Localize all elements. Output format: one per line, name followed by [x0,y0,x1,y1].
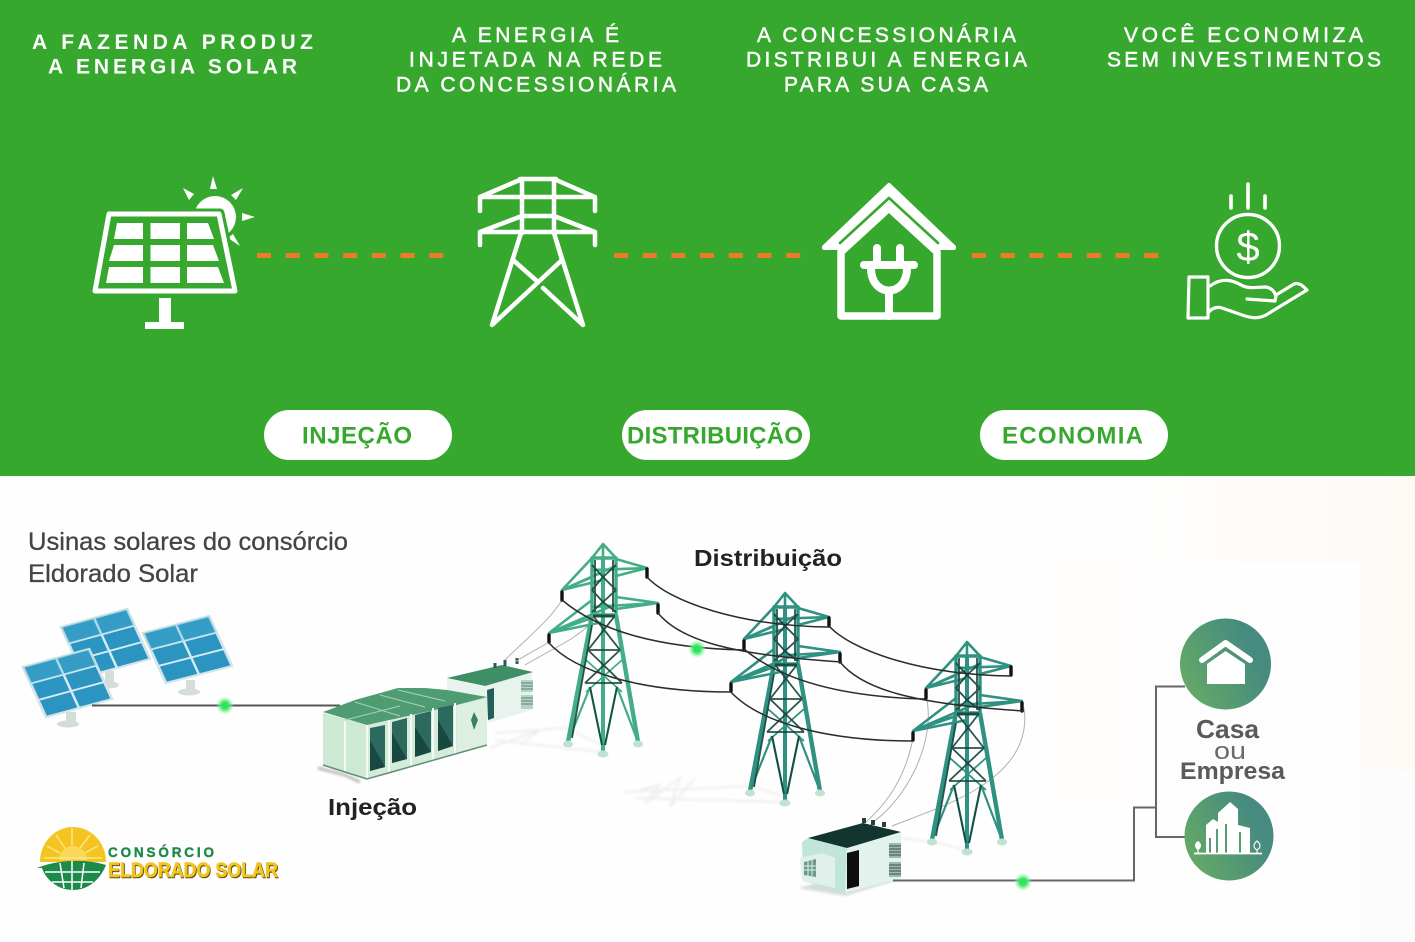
heading: você economiza [1107,24,1381,72]
heading: a energia é injetada [396,24,676,97]
button: injeção [264,410,452,460]
heading: a energia é injetada: DA CONCESSIONÁRIA [396,74,676,97]
icon: solar panel with sun [93,176,255,329]
marker: green dot 2 [688,640,706,658]
text: casa ou empresa: Empresa [1180,758,1286,785]
icon: buildings circle [1184,792,1274,880]
arrow: dashed connector economia [972,253,1159,258]
heading: a energia é injetada: A ENERGIA É [452,24,619,47]
shadow: ground shadows [318,728,967,850]
logo: consórcio eldorado solar [37,827,279,890]
illustration: tower 2 [731,593,840,806]
heading: a fazenda produz: A ENERGIA SOLAR [48,56,297,78]
cable: panels to injection [92,704,340,706]
text: distribuição label: Distribuição [694,545,842,571]
illustration: transformer [798,818,901,896]
illustration: injection units [323,658,533,779]
button: distribuição [622,410,810,460]
logo: consórcio eldorado solar: ELDORADO SOLAR [108,859,278,882]
heading: a energia é injetada: INJETADA NA REDE [409,49,662,72]
text: usinas solares: Usinas solares do consórcio [28,528,348,556]
illustration: tower 1 [549,544,658,758]
illustration: tower 3 [913,642,1022,856]
heading: você economiza: VOCÊ ECONOMIZA [1124,24,1363,47]
illustration: solar panels [23,609,232,728]
button: economia: ECONOMIA [1002,422,1143,450]
text: injeção label: Injeção [328,794,417,820]
logo: consórcio eldorado solar: ELDORADO SOLAR [109,860,279,883]
button: injeção: INJEÇÃO [302,422,412,450]
icon: transmission tower [480,179,595,325]
icon: hand holding coin [1188,184,1307,318]
button: distribuição: DISTRIBUIÇÃO [627,422,803,450]
logo: consórcio eldorado solar: CONSÓRCIO [108,845,214,860]
cable: transformer to consumers [893,686,1186,880]
icon: house circle [1180,618,1271,710]
marker: green dot 3 [1014,873,1032,891]
heading: a concessionária distribui: DISTRIBUI A ENERGIA [746,49,1027,72]
text: casa ou empresa: Casa [1196,714,1260,744]
heading: a fazenda produz: A FAZENDA PRODUZ [32,31,313,54]
cables: power lines span 2 [730,626,1024,741]
heading: a concessionária distribui: A CONCESSIONÁRIA [757,24,1016,47]
cables: power lines span 1 [548,577,842,692]
cables: thin feeders [505,600,1025,826]
text: usinas solares: Eldorado Solar [28,560,198,588]
text: casa ou empresa: ou [1214,738,1246,765]
icon: house with plug [824,185,954,316]
heading: a concessionária distribui [746,24,1027,97]
heading: a concessionária distribui: PARA SUA CASA [784,74,988,97]
panel: lower energy flow diagram [23,528,1286,896]
arrow: dashed connector injeção [257,253,444,258]
panel: green process band [0,0,1415,476]
arrow: dashed connector distribuição [614,253,801,258]
heading: a fazenda produz [32,31,313,78]
text: casa ou empresa [1180,714,1286,785]
button: economia [980,410,1168,460]
icon: hand holding coin: $ [1236,223,1260,270]
logo mark: sun and solar field [37,827,106,890]
heading: você economiza: SEM INVESTIMENTOS [1107,49,1381,72]
text: usinas solares [28,528,348,588]
marker: green dot 1 [216,696,234,714]
